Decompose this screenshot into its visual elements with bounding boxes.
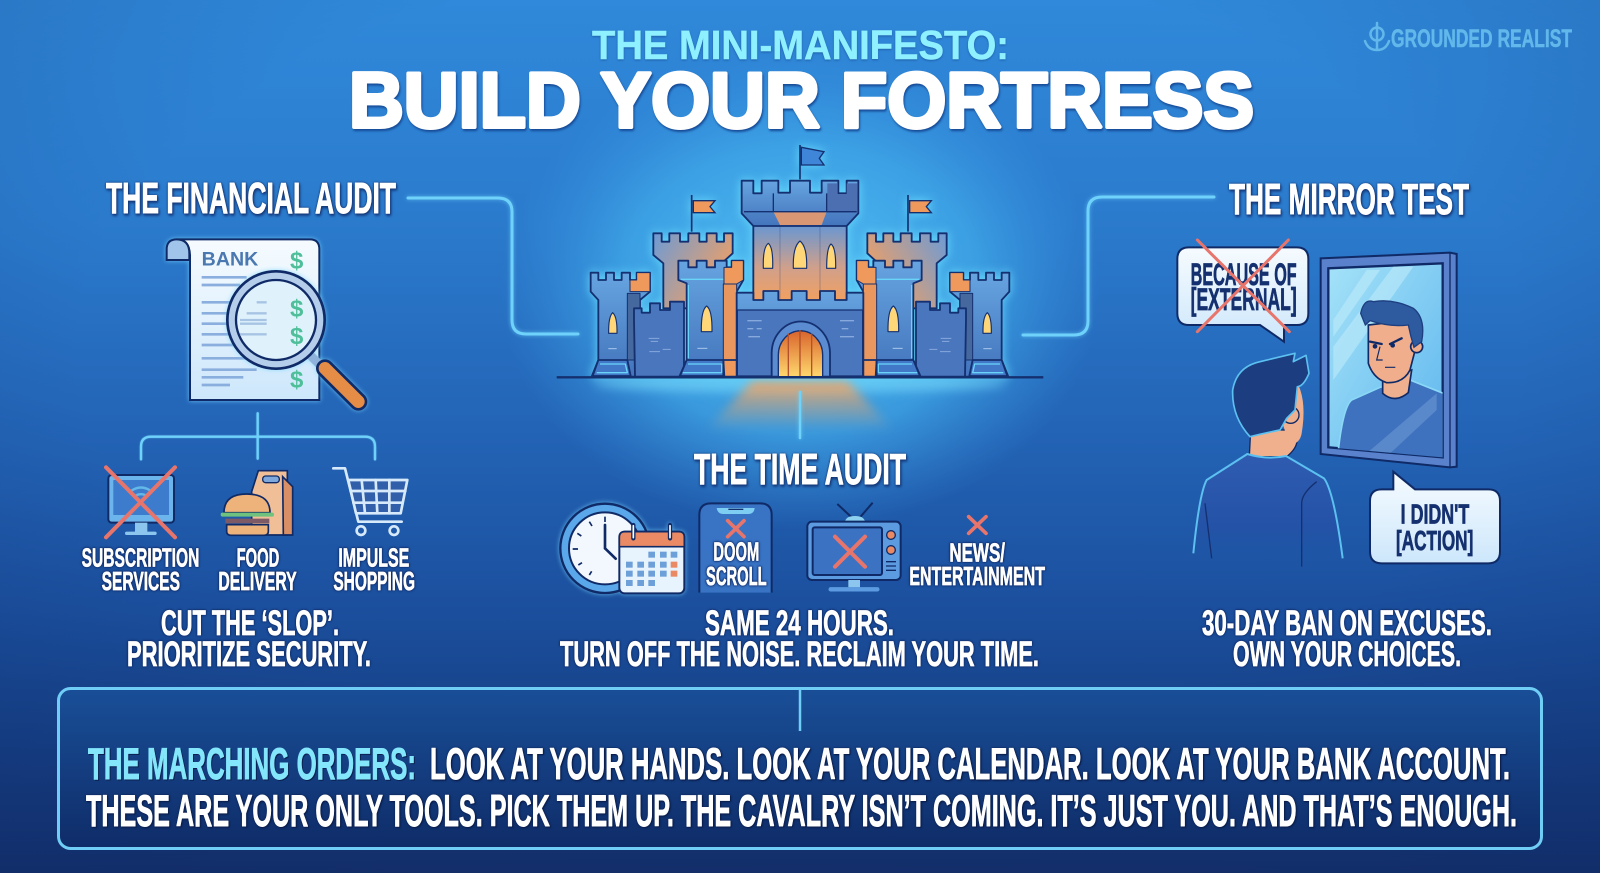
- caption: same 24 hours: [560, 603, 1039, 674]
- connector: financial audit to castle: [408, 198, 578, 334]
- news and entertainment label: NEWS/: [949, 538, 1005, 568]
- dollar signs: $: [290, 366, 303, 393]
- heading: financial audit: THE FINANCIAL AUDIT: [106, 174, 396, 223]
- heading: time audit: THE TIME AUDIT: [694, 445, 906, 494]
- speech bubble: ownership: [1370, 472, 1500, 563]
- caption: 30-day ban: [1202, 603, 1492, 674]
- panel: the marching orders: [58, 688, 1542, 848]
- icon: castle: [557, 145, 1043, 430]
- caption: cut the slop: [127, 603, 371, 674]
- centre wall: [737, 291, 863, 377]
- gate: [772, 321, 830, 377]
- icon: food delivery: [223, 471, 293, 535]
- icon: bank statement: [167, 239, 319, 400]
- main keep: [742, 181, 858, 303]
- icon: bank statement: BANK: [202, 249, 258, 270]
- dollar signs: [290, 248, 303, 393]
- connector: mirror test to castle: [1023, 197, 1214, 335]
- icon: phone doom scroll: [699, 503, 772, 593]
- icon labels: IMPULSE: [338, 543, 409, 573]
- icon labels: [82, 543, 415, 596]
- main title: BUILD YOUR FORTRESS: [349, 56, 1254, 144]
- icon labels: DELIVERY: [218, 566, 297, 596]
- reflection of man: [1333, 267, 1443, 460]
- caption: cut the slop: CUT THE ‘SLOP’.: [161, 603, 339, 643]
- icon labels: SUBSCRIPTION: [82, 543, 199, 573]
- icon labels: SERVICES: [102, 566, 180, 596]
- panel: the time audit: [560, 445, 1045, 674]
- floor glow: [593, 375, 1007, 430]
- financial icons: [82, 239, 415, 596]
- speech bubble: ownership: [ACTION]: [1396, 525, 1473, 556]
- panel: the mirror test: [1177, 175, 1500, 674]
- marching orders label: THE MARCHING ORDERS:: [88, 740, 416, 789]
- icon: television: [807, 503, 901, 589]
- icon: mirror: [1321, 253, 1457, 467]
- icon labels: FOOD: [237, 543, 279, 573]
- connector tree: [141, 413, 375, 459]
- title: [349, 22, 1254, 144]
- figure: man from behind: [1193, 353, 1343, 567]
- caption: same 24 hours: SAME 24 HOURS.: [705, 603, 894, 643]
- time icons: [560, 503, 1045, 593]
- mirror scene: [1177, 240, 1500, 567]
- dollar signs: $: [290, 296, 303, 323]
- icon: anchor: [1365, 23, 1389, 50]
- subtitle: THE MINI-MANIFESTO:: [592, 22, 1009, 68]
- right castle wing: [857, 233, 1009, 377]
- icon labels: SHOPPING: [333, 566, 415, 596]
- connector: castle to time audit: [799, 392, 801, 438]
- speech bubble: ownership: I DIDN'T: [1401, 498, 1469, 529]
- panel: the financial audit: [82, 174, 415, 674]
- icon: phone doom scroll: DOOM: [713, 537, 759, 567]
- icon: magnifying glass: [227, 271, 358, 402]
- speech bubble: excuse: [EXTERNAL]: [1191, 282, 1297, 317]
- dollar signs: $: [290, 323, 303, 350]
- caption: cut the slop: PRIORITIZE SECURITY.: [127, 634, 371, 674]
- castle body: [591, 145, 1009, 377]
- icon: clock and calendar: [560, 504, 684, 593]
- icon: phone doom scroll: SCROLL: [706, 561, 767, 591]
- icon: shopping cart: [333, 468, 407, 535]
- caption: same 24 hours: TURN OFF THE NOISE. RECLAIM YOUR TIME.: [560, 634, 1039, 674]
- news and entertainment label: [909, 517, 1045, 591]
- ground line: [557, 374, 1043, 381]
- speech bubble: excuse: [1177, 240, 1308, 342]
- icon: subscription monitor: [106, 467, 175, 537]
- left castle wing: [591, 233, 743, 377]
- speech bubble: excuse: BECAUSE OF: [1191, 257, 1297, 292]
- castle flags: [692, 145, 931, 232]
- news and entertainment label: ENTERTAINMENT: [909, 561, 1045, 591]
- dollar signs: $: [290, 248, 303, 275]
